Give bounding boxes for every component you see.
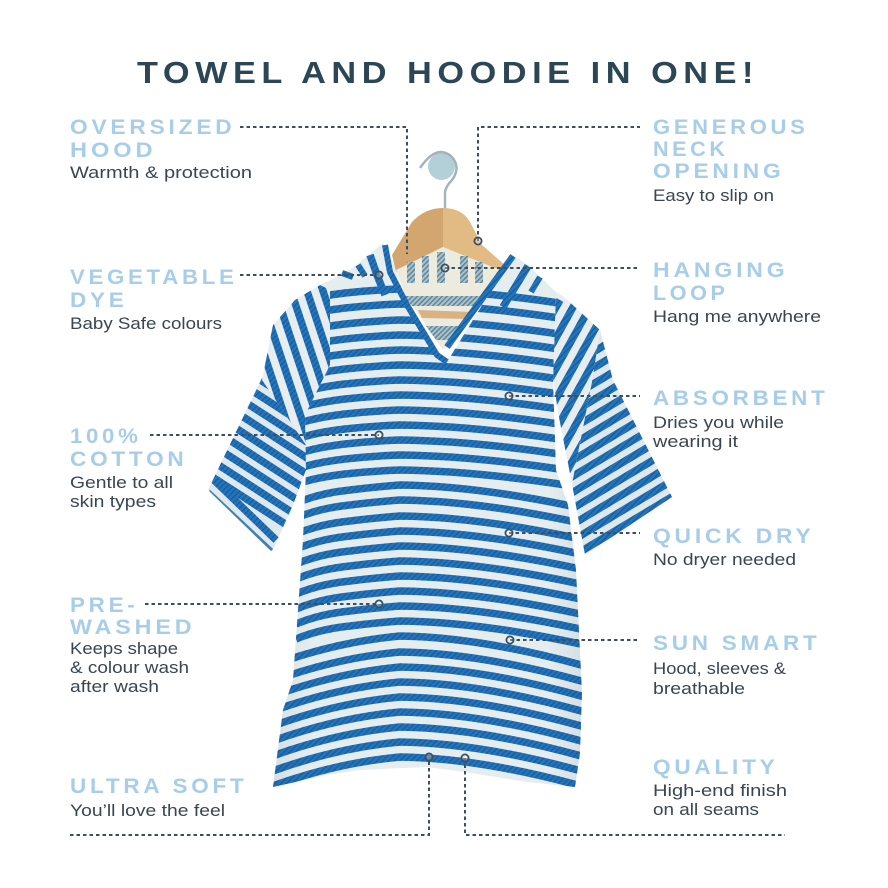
hood left flap — [342, 245, 447, 362]
callout: pre-washed: & colour wash — [70, 658, 189, 677]
title: TOWEL AND HOODIE IN ONE! — [137, 55, 759, 90]
callout: 100% cotton: 100% — [70, 425, 142, 448]
callout: generous neck opening — [653, 116, 808, 205]
callout: vegetable dye: VEGETABLE — [70, 266, 238, 289]
callout: ultra soft — [70, 775, 247, 820]
right sleeve upper panel — [553, 292, 600, 483]
left sleeve upper panel — [262, 285, 330, 444]
callout: pre-washed: Keeps shape — [70, 639, 178, 658]
callout: pre-washed: after wash — [70, 677, 159, 696]
callout: quick dry — [653, 525, 814, 569]
callout: sun smart — [653, 632, 820, 698]
callout: 100% cotton: Gentle to all — [70, 473, 173, 492]
callout: quick dry: QUICK DRY — [653, 525, 814, 548]
callout: hanging loop: Hang me anywhere — [653, 307, 821, 326]
callout: generous neck opening: GENEROUS — [653, 116, 808, 139]
callout: vegetable dye: Baby Safe colours — [70, 314, 222, 333]
callout: vegetable dye — [70, 266, 238, 333]
callout: quality: High-end finish — [653, 781, 787, 800]
callout: 100% cotton: COTTON — [70, 448, 188, 471]
callout: quick dry: No dryer needed — [653, 550, 796, 569]
callout: pre-washed — [70, 594, 196, 696]
callout: hanging loop — [653, 259, 821, 326]
callout: absorbent: Dries you while — [653, 413, 784, 432]
callout: oversized hood — [70, 116, 252, 182]
callout: absorbent — [652, 387, 828, 451]
marker rings — [375, 237, 514, 762]
callout: vegetable dye: DYE — [70, 289, 128, 312]
callout: absorbent: ABSORBENT — [653, 387, 828, 410]
callout: generous neck opening: Easy to slip on — [653, 186, 774, 205]
callout: generous neck opening: OPENING — [653, 160, 784, 183]
callout: 100% cotton: skin types — [70, 492, 156, 511]
callout: oversized hood: Warmth & protection — [70, 163, 252, 182]
callout: sun smart: Hood, sleeves & — [653, 659, 787, 678]
left sleeve lower panel — [208, 378, 306, 552]
callout: ultra soft: ULTRA SOFT — [70, 775, 247, 798]
callout: generous neck opening: NECK — [653, 138, 728, 161]
callout: quality — [653, 756, 787, 819]
right sleeve lower panel — [572, 330, 672, 555]
callout: quality: on all seams — [653, 800, 759, 819]
callout: sun smart: SUN SMART — [653, 632, 820, 655]
leader lines — [70, 127, 785, 835]
callout: absorbent: wearing it — [652, 432, 738, 451]
hood right flap — [447, 256, 540, 347]
body with horizontal stripes — [273, 243, 582, 787]
callout: pre-washed: WASHED — [70, 616, 196, 639]
callout: oversized hood: HOOD — [70, 139, 156, 162]
callout: ultra soft: You’ll love the feel — [70, 801, 225, 820]
icon: hanger — [392, 152, 507, 276]
callout: hanging loop: LOOP — [653, 282, 728, 305]
callout: oversized hood: OVERSIZED — [70, 116, 235, 139]
callout: 100% cotton — [70, 425, 188, 511]
callout: sun smart: breathable — [653, 679, 745, 698]
callout: quality: QUALITY — [653, 756, 778, 779]
garment: striped hooded towel on hanger — [208, 150, 672, 787]
callout: pre-washed: PRE- — [70, 594, 138, 617]
callout: hanging loop: HANGING — [653, 259, 788, 282]
hood interior — [396, 247, 505, 350]
